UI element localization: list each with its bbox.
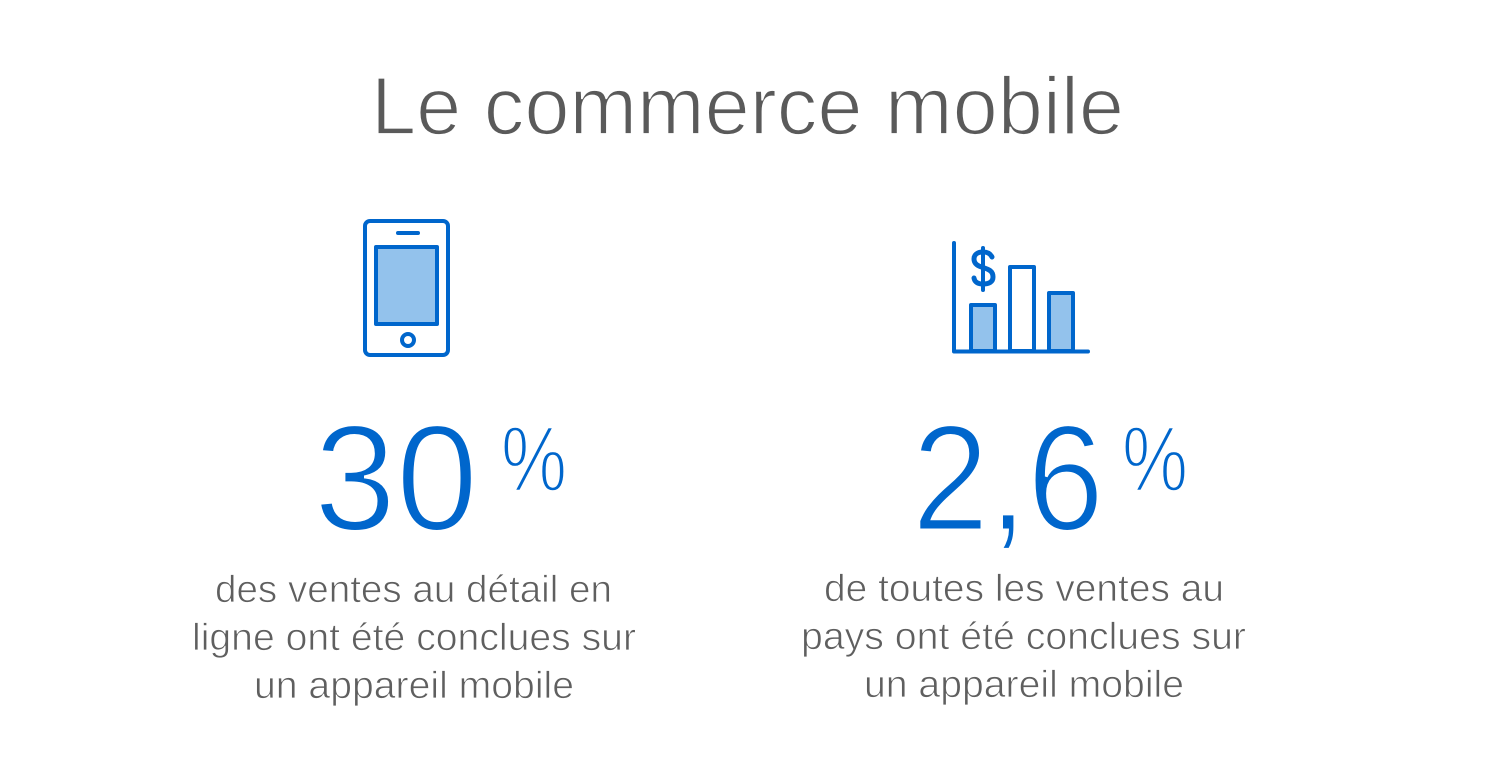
statistic: 30 %: % (501, 407, 567, 511)
statistic: 2,6 %: % (1122, 407, 1188, 511)
statistic: 2,6 %: 2,6 (912, 393, 1104, 562)
description: 2,6 %: un appareil mobile (864, 664, 1184, 706)
icon: bar chart with dollar sign (954, 243, 1088, 352)
statistic: 30 % (314, 393, 567, 562)
statistic: 30 %: 30 (314, 393, 478, 562)
description: 30 %: ligne ont été conclues sur (192, 617, 636, 659)
title: Le commerce mobile (371, 61, 1124, 152)
description: 2,6 %: de toutes les ventes au (824, 568, 1224, 610)
panel: mobile share of all national sales (801, 243, 1246, 706)
description: 30 %: un appareil mobile (254, 665, 574, 707)
description: 2,6 % (801, 568, 1246, 706)
panel: mobile share of online retail sales (192, 221, 636, 707)
description: 30 %: des ventes au détail en (215, 569, 612, 611)
icon: smartphone (365, 221, 448, 355)
description: 30 % (192, 569, 636, 707)
description: 2,6 %: pays ont été conclues sur (801, 616, 1246, 658)
